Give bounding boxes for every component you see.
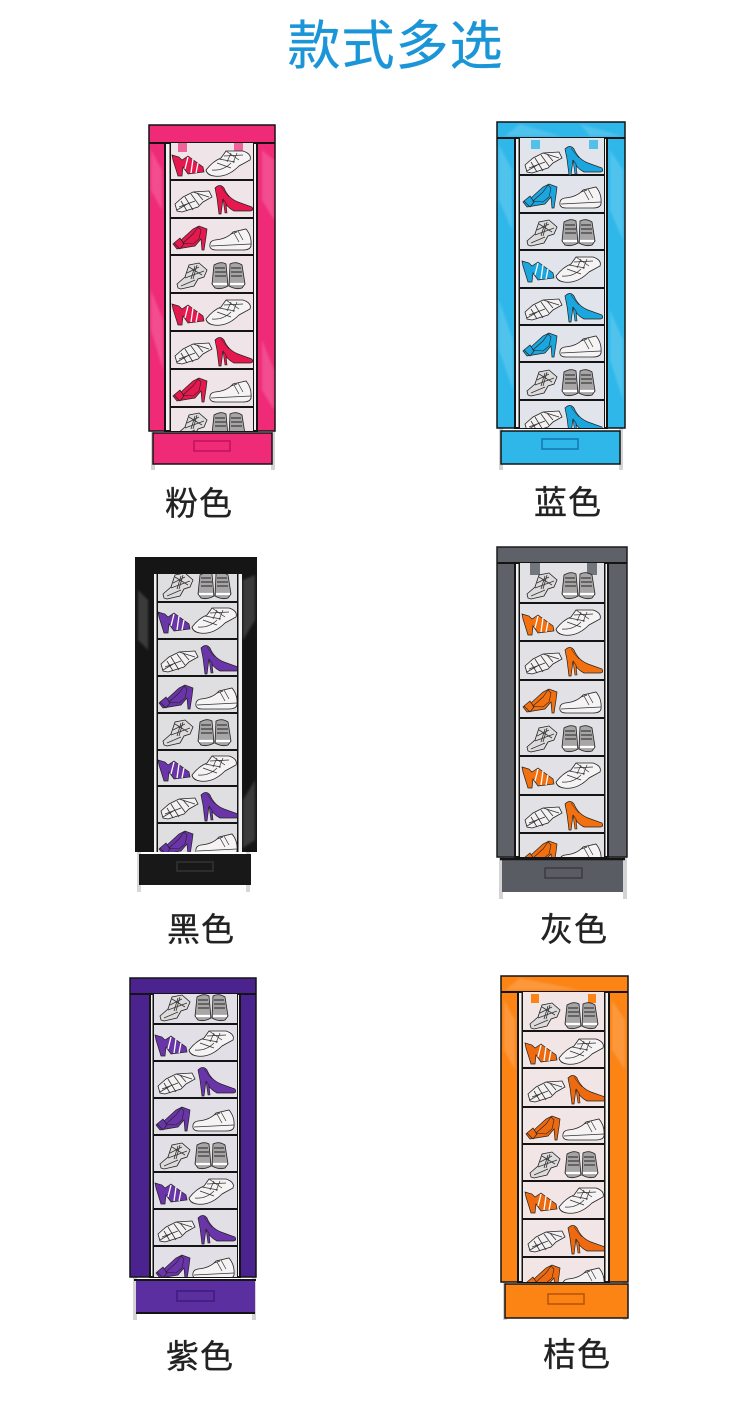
purple frame xyxy=(130,978,256,1277)
wardrobe: black xyxy=(135,557,257,892)
label: purple: 紫色 xyxy=(166,1338,234,1375)
wardrobe: gray xyxy=(497,547,627,899)
blue drawer xyxy=(501,431,620,464)
label: blue: 蓝色 xyxy=(534,484,602,521)
label: black: 黑色 xyxy=(167,911,235,948)
wardrobe: orange xyxy=(501,976,628,1320)
label: pink: 粉色 xyxy=(165,485,233,522)
pink frame xyxy=(149,125,275,431)
gray frame xyxy=(497,547,627,857)
orange drawer xyxy=(505,1284,628,1318)
wardrobe: pink xyxy=(149,125,275,470)
black frame xyxy=(135,557,257,852)
pink drawer xyxy=(153,433,272,464)
black drawer xyxy=(139,854,251,885)
purple drawer xyxy=(136,1280,255,1313)
label: gray: 灰色 xyxy=(540,911,608,948)
wardrobe: purple xyxy=(130,978,256,1320)
gray drawer xyxy=(502,859,623,892)
label: orange: 桔色 xyxy=(543,1336,611,1373)
blue frame xyxy=(497,122,625,428)
title: 款式多选 xyxy=(288,17,504,76)
wardrobe: blue xyxy=(497,122,625,470)
orange frame xyxy=(501,976,628,1282)
